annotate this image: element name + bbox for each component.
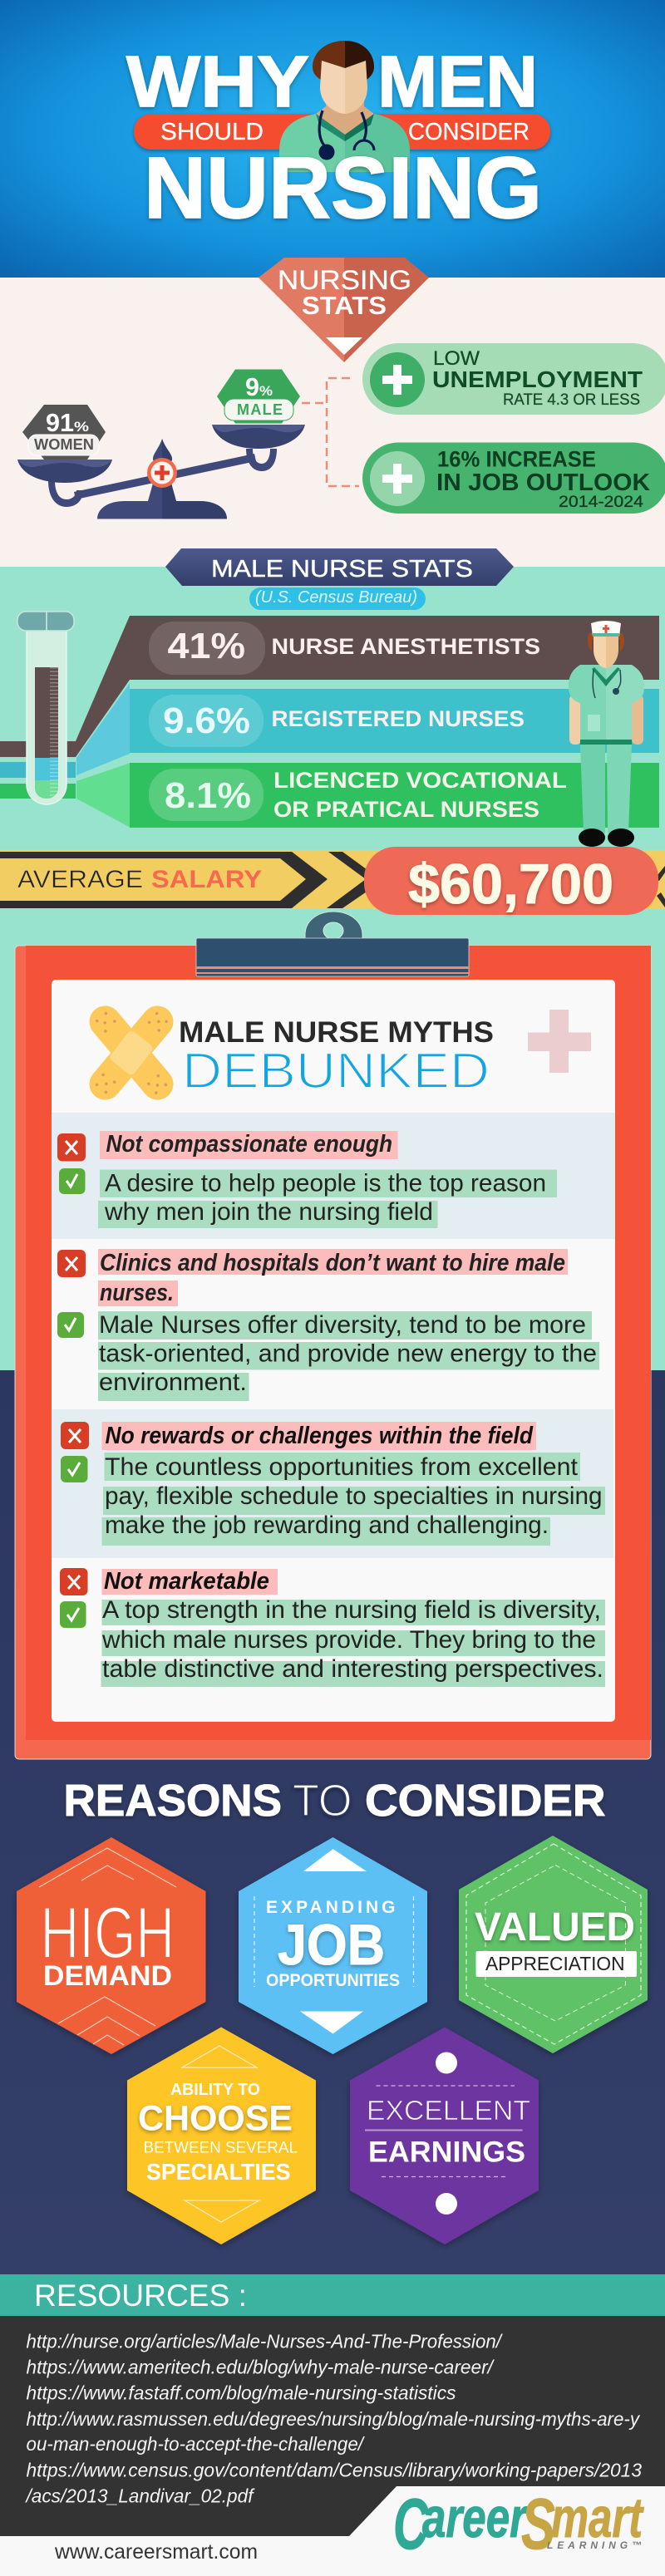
stat bar: licensed vocational nurses [130, 763, 659, 828]
icon: check mark [59, 1168, 85, 1194]
icon: cross mark [57, 1133, 86, 1162]
paper sheet [52, 980, 615, 1722]
resources heading bar: RESOURCES : [34, 2279, 247, 2313]
clipboard ring [305, 912, 362, 943]
heading: debunked: DEBUNKED [182, 1043, 490, 1099]
stat bar: nurse anesthetists: 41% [168, 626, 245, 666]
myth text: Clinics and hospitals don’t want to hire male [100, 1250, 565, 1276]
badge: 91% women: 91 [46, 408, 74, 437]
stat bar: registered nurses: REGISTERED NURSES [271, 706, 525, 731]
clipboard board [15, 946, 651, 1759]
hexagon: valued appreciation [459, 1836, 648, 2053]
fact text: A desire to help people is the top reason [105, 1170, 546, 1197]
banner: male nurse stats: MALE NURSE STATS [211, 556, 473, 583]
resource links: http://www.rasmussen.edu/degrees/nursing/blog/male-nursing-myths-are-y [27, 2408, 640, 2430]
heading: reasons to consider [63, 1776, 605, 1826]
fact text [98, 1170, 557, 1228]
stat bar: licensed vocational nurses: 8.1% [165, 775, 251, 816]
hexagon: ability to choose: BETWEEN SEVERAL [143, 2139, 298, 2157]
badge: nursing stats: STATS [302, 291, 387, 320]
fact text [98, 1311, 599, 1401]
hexagon: ability to choose: CHOOSE [138, 2099, 293, 2139]
logo: CareerSmart Learning: C [393, 2485, 429, 2564]
badge: 91% women: WOMEN [34, 436, 94, 453]
icon: male nurse bust [279, 41, 410, 172]
right pan [212, 425, 305, 449]
logo: CareerSmart Learning [393, 2485, 644, 2564]
icon: check mark [60, 1601, 86, 1628]
stat bar: nurse anesthetists: NURSE ANESTHETISTS [271, 634, 540, 659]
heading: reasons to consider: CONSIDER [365, 1776, 605, 1826]
fact text: task-oriented, and provide new energy to the [99, 1340, 597, 1368]
heading: reasons to consider: TO [293, 1776, 352, 1826]
badge: 91% women [22, 405, 106, 460]
footer panel [0, 2486, 665, 2576]
fact text: Male Nurses offer diversity, tend to be more [99, 1311, 586, 1339]
stat pill: job outlook [362, 442, 665, 514]
resource links: https://www.census.gov/content/dam/Census/library/working-papers/2013 [27, 2460, 642, 2481]
badge: 9% male [217, 369, 300, 424]
scale base and post [97, 439, 227, 519]
hexagon: high demand: DEMAND [43, 1960, 172, 1992]
badge: 91% women: % [74, 419, 89, 435]
myth 1 [52, 1113, 615, 1239]
connector strips [0, 616, 131, 828]
scale beam and hooks [48, 449, 277, 507]
fact text: make the job rewarding and challenging. [105, 1512, 549, 1539]
hexagon: excellent earnings [350, 2028, 539, 2244]
scale centre cross [147, 458, 177, 488]
heading: male nurse myths: MALE NURSE MYTHS [179, 1016, 494, 1049]
hexagon: excellent earnings: EXCELLENT [367, 2095, 530, 2126]
title: MEN: MEN [377, 42, 538, 122]
hexagon: ability to choose [127, 2028, 316, 2244]
icon: faded medical cross [528, 1010, 591, 1073]
stat bar: licensed vocational nurses: LICENCED VOCATIONAL [273, 768, 567, 793]
salary value: $60,700 [408, 853, 613, 916]
hexagon: expanding job opportunities: OPPORTUNITIES [266, 1971, 400, 1990]
badge: nursing stats [259, 258, 429, 362]
title: NURSING: NURSING [144, 140, 542, 237]
clipboard [15, 912, 651, 1759]
myth 3 [52, 1409, 613, 1558]
myth text: nurses. [100, 1280, 174, 1306]
title: WHY: WHY [126, 42, 309, 122]
title: CONSIDER: CONSIDER [408, 119, 530, 145]
salary edge stripes [654, 866, 665, 907]
stat bar: nurse anesthetists [130, 616, 659, 680]
chevron stripes [0, 852, 328, 908]
icon: cross mark [60, 1568, 88, 1595]
myth text: Not marketable [104, 1568, 269, 1595]
stat bar: registered nurses [130, 689, 659, 753]
resources heading bar [0, 2274, 665, 2316]
icon: test tube [17, 612, 74, 804]
stat pill: low unemployment [362, 343, 665, 415]
hexagon: valued appreciation: APPRECIATION [485, 1953, 625, 1974]
logo: CareerSmart Learning: LEARNING™ [547, 2539, 642, 2551]
resource links: https://www.ameritech.edu/blog/why-male-nurse-career/ [27, 2357, 495, 2378]
stat pill: job outlook: 16% INCREASE [437, 447, 596, 472]
myth text: Not compassionate enough [106, 1131, 392, 1158]
salary value pill [364, 847, 658, 915]
icon: standing male nurse [569, 621, 644, 847]
fact text: table distinctive and interesting perspectives. [102, 1655, 603, 1683]
hexagon: excellent earnings: EARNINGS [368, 2136, 525, 2169]
cream stats background [0, 278, 665, 567]
header background [0, 0, 665, 278]
logo: CareerSmart Learning: S [521, 2485, 555, 2564]
hexagon: ability to choose: SPECIALTIES [146, 2159, 291, 2185]
badge: nursing stats: NURSING [278, 265, 411, 295]
icon: crossed bandages [83, 1000, 180, 1106]
stat pill: job outlook: IN JOB OUTLOOK [436, 469, 650, 496]
myth text: No rewards or challenges within the field [105, 1423, 534, 1449]
badge: 9% male: MALE [237, 401, 283, 418]
stat pill: job outlook: 2014-2024 [559, 494, 643, 511]
icon: check mark [61, 1456, 88, 1482]
footer website: www.careersmart.com [54, 2540, 258, 2564]
balance scale [17, 369, 305, 519]
clipboard clip [196, 938, 469, 976]
stat pill: low unemployment: UNEMPLOYMENT [432, 366, 643, 392]
source pill: U.S. Census Bureau: (U.S. Census Bureau) [255, 588, 417, 607]
fact text: environment. [99, 1369, 247, 1396]
icon: check mark [57, 1312, 84, 1338]
fact text: why men join the nursing field [104, 1198, 433, 1226]
banner: male nurse stats [165, 548, 514, 586]
hexagon: high demand [17, 1837, 206, 2054]
clipboard right edge [628, 946, 651, 1740]
title block [126, 41, 550, 237]
heading: reasons to consider: REASONS [63, 1776, 282, 1826]
stat pill: low unemployment: RATE 4.3 OR LESS [503, 391, 640, 409]
salary band [0, 847, 665, 916]
fact text: which male nurses provide. They bring to the [101, 1626, 596, 1654]
resource links: ou-man-enough-to-accept-the-challenge/ [27, 2433, 365, 2455]
resources panel [0, 2316, 665, 2536]
title: should consider ribbon [134, 114, 550, 150]
fact text [101, 1596, 605, 1687]
stat bar: registered nurses: 9.6% [163, 701, 250, 741]
clipboard board inner [26, 946, 628, 1740]
myth text [98, 1249, 568, 1306]
fact text: A top strength in the nursing field is diversity, [102, 1596, 601, 1624]
icon: cross mark [61, 1422, 89, 1449]
mint stats background [0, 567, 665, 1370]
fact text: pay, flexible schedule to specialties in nursing [105, 1482, 602, 1510]
fact text [101, 1453, 605, 1546]
resource links [25, 2330, 642, 2506]
hexagon: valued appreciation: VALUED [475, 1905, 635, 1949]
dashed connector [302, 378, 359, 486]
left pan [17, 460, 112, 483]
badge: 9% male: % [259, 383, 273, 399]
hexagon: expanding job opportunities [239, 1837, 427, 2054]
salary label accent: SALARY [151, 866, 262, 893]
badge: 9% male: 9 [245, 372, 259, 401]
second chevron [327, 852, 382, 908]
resource links: /acs/2013_Landivar_02.pdf [25, 2485, 255, 2506]
icon: cross mark [57, 1250, 86, 1277]
navy reasons background [0, 1370, 665, 2274]
stat pill: low unemployment: LOW [433, 347, 480, 370]
salary label: AVERAGE [17, 866, 143, 893]
myth 2 [57, 1249, 599, 1401]
title: SHOULD: SHOULD [160, 119, 264, 145]
hexagon: expanding job opportunities: EXPANDING [266, 1898, 396, 1917]
hexagon: ability to choose: ABILITY TO [170, 2081, 260, 2099]
myth 4 [60, 1568, 605, 1687]
resource links: https://www.fastaff.com/blog/male-nursing-statistics [27, 2382, 456, 2403]
hexagon: high demand: HIGH [40, 1891, 175, 1974]
fact text: The countless opportunities from excellent [105, 1453, 578, 1481]
stat bar: licensed vocational nurses: OR PRATICAL NURSES [273, 797, 539, 822]
logo: CareerSmart Learning: areer [422, 2486, 529, 2549]
hexagon: expanding job opportunities: JOB [278, 1913, 385, 1977]
resource links: http://nurse.org/articles/Male-Nurses-And-The-Profession/ [27, 2330, 503, 2352]
